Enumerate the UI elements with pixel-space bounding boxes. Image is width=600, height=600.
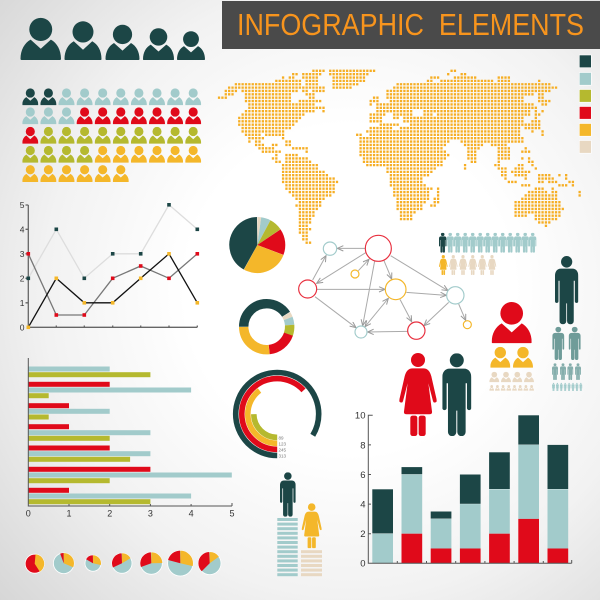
large woman figure	[399, 353, 437, 436]
radial progress chart: 313	[278, 454, 287, 458]
line chart: 5	[20, 200, 25, 210]
horizontal bar chart: 0	[26, 508, 31, 518]
line chart: 3	[20, 249, 25, 259]
stacked bar chart: 4	[360, 500, 366, 510]
pie 3	[85, 555, 101, 571]
bust hierarchy pictogram	[489, 302, 534, 391]
pie 6	[168, 551, 193, 576]
large man figure	[442, 353, 471, 436]
pie 1	[25, 554, 44, 573]
horizontal bar chart: 5	[229, 508, 235, 518]
radial progress chart: 89	[278, 436, 284, 440]
stacked bar chart: 0	[360, 559, 366, 570]
pie 7	[198, 552, 221, 575]
horizontal bar chart: 4	[189, 508, 194, 518]
stacked bar chart	[355, 411, 572, 570]
line chart: 0	[20, 322, 25, 332]
radial progress chart: 123	[278, 442, 287, 446]
horizontal bar chart: 1	[66, 508, 72, 518]
man hierarchy pictogram	[552, 256, 582, 391]
large person icons row	[20, 18, 205, 60]
radial progress chart: 245	[278, 448, 287, 452]
podium: man on striped column	[277, 472, 298, 576]
horizontal bar chart	[26, 358, 235, 518]
standing men pictogram row	[439, 233, 536, 253]
pie chart	[238, 226, 277, 264]
line chart: 1	[20, 298, 25, 308]
radial progress chart	[236, 372, 319, 458]
line chart: 4	[20, 224, 25, 234]
dotted world map	[218, 71, 581, 243]
standing women pictogram row	[439, 255, 496, 275]
small person icon grid	[22, 88, 201, 182]
network diagram	[299, 235, 471, 339]
stacked bar chart: 2	[360, 529, 366, 540]
horizontal bar chart: 3	[148, 508, 153, 518]
pie 2	[53, 553, 74, 574]
pie 5	[140, 552, 162, 574]
small pie charts row	[25, 551, 221, 576]
line chart: 2	[20, 273, 25, 283]
stacked bar chart: 8	[360, 440, 366, 451]
pie 4	[112, 553, 132, 573]
stacked bar chart: 6	[360, 470, 366, 481]
horizontal bar chart: 2	[107, 508, 112, 518]
donut chart	[235, 295, 298, 358]
stacked bar chart: 10	[355, 411, 366, 422]
podium: woman on striped column	[301, 503, 322, 576]
colour legend swatches	[579, 55, 591, 153]
line chart	[20, 200, 199, 332]
